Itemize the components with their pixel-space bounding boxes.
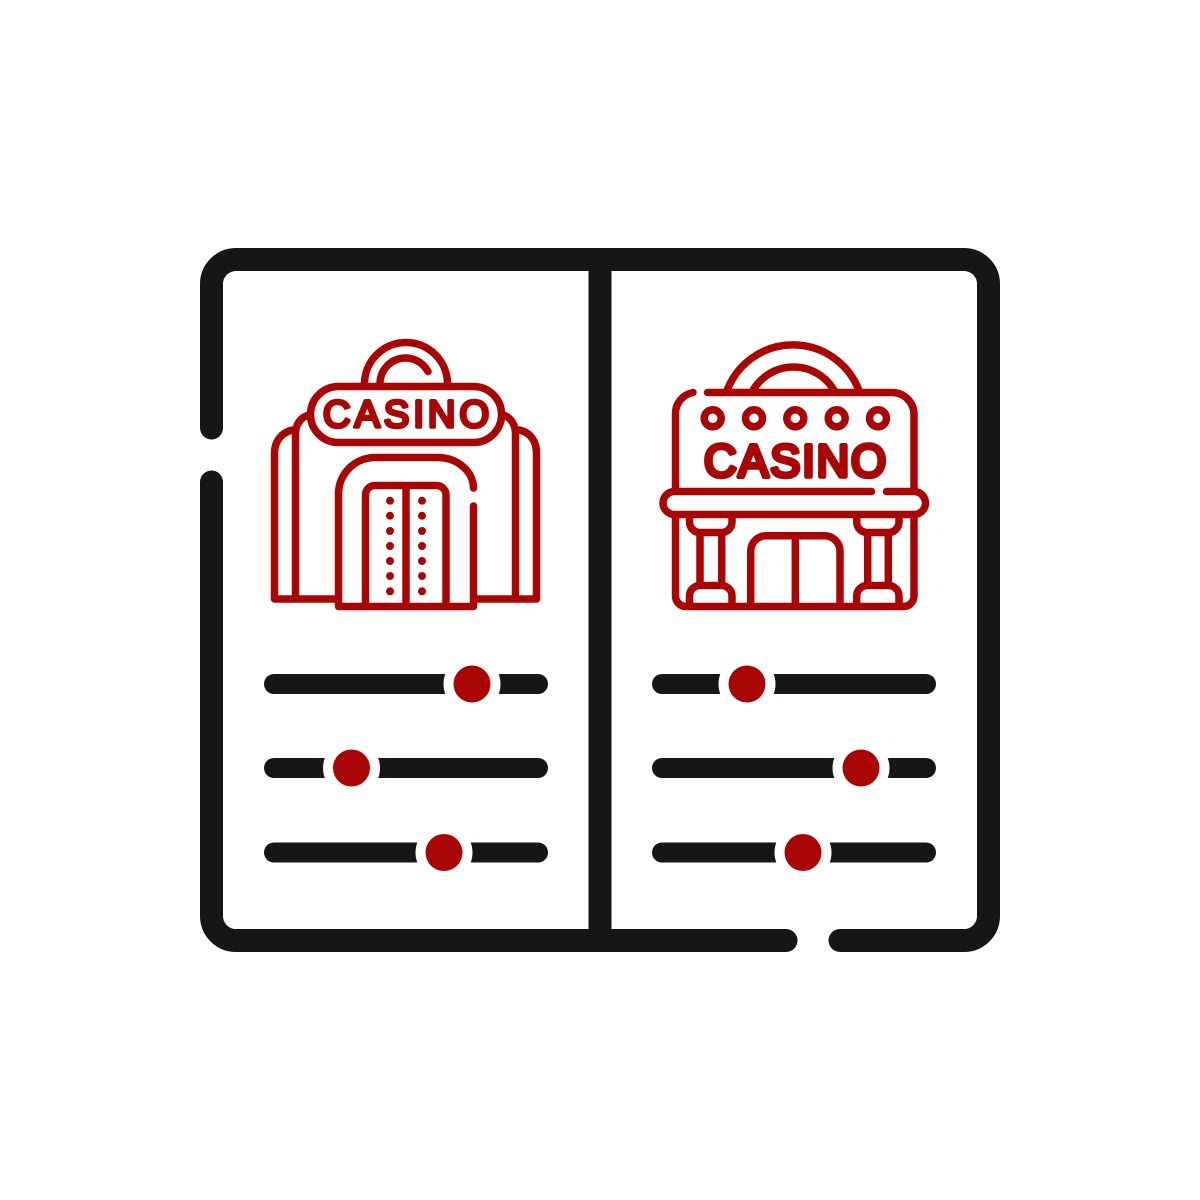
book frame (212, 260, 988, 940)
sliders: right panel (662, 656, 926, 881)
icon: casino building right: CASINO (704, 436, 886, 487)
icon: casino building right (663, 345, 926, 606)
icon: casino building left (274, 342, 536, 606)
sliders: left panel (274, 656, 538, 881)
icon: casino building left: CASINO (323, 394, 489, 436)
